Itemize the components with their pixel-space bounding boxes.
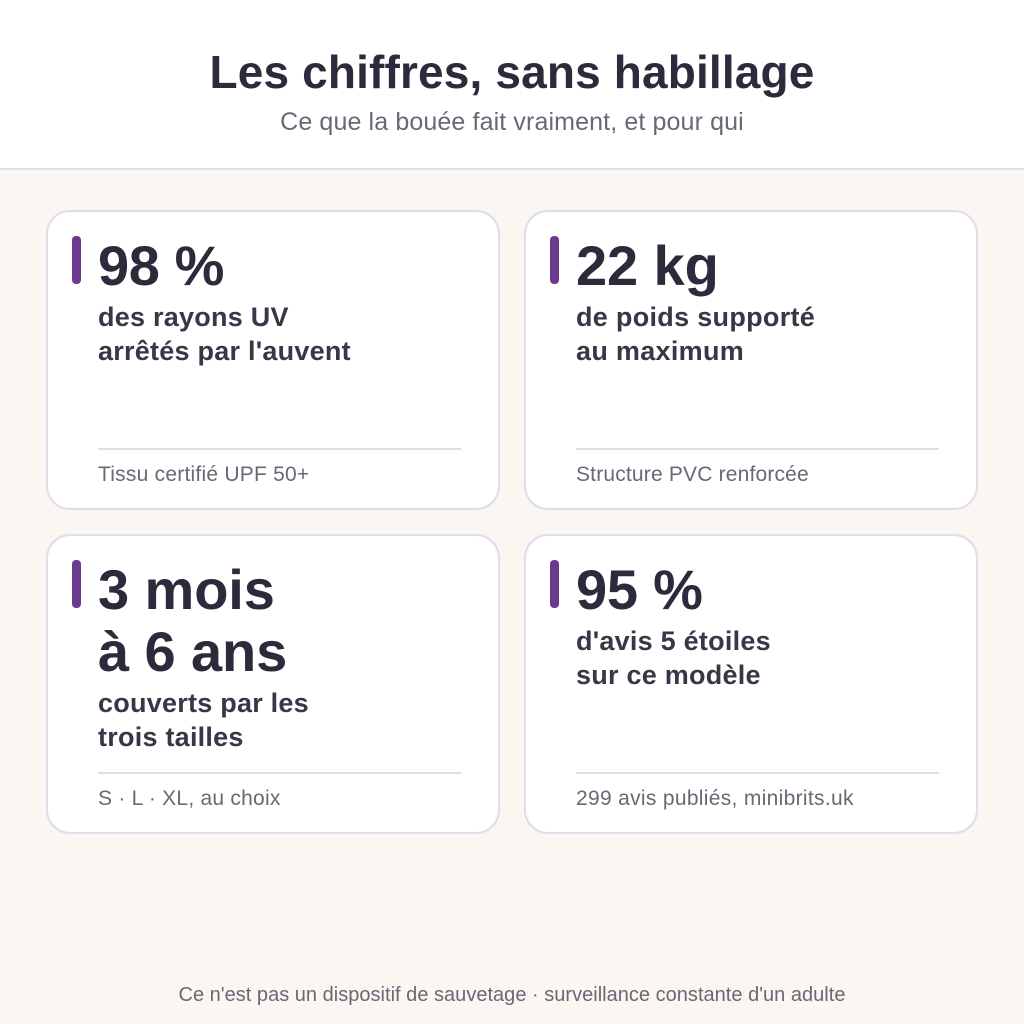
description: d'avis 5 étoiles — [576, 626, 771, 656]
divider — [98, 448, 461, 450]
header band — [0, 0, 1024, 170]
big number: 3 mois — [98, 558, 275, 621]
description: au maximum — [576, 336, 744, 366]
description: trois tailles — [98, 722, 244, 752]
divider — [576, 772, 939, 774]
big number — [98, 558, 287, 683]
description: sur ce modèle — [576, 660, 761, 690]
big number: 98 % — [98, 234, 224, 297]
footnote: Tissu certifié UPF 50+ — [98, 463, 309, 486]
footnote: 299 avis publiés, minibrits.uk — [576, 787, 854, 810]
description — [576, 302, 815, 366]
description: des rayons UV — [98, 302, 289, 332]
big number: 22 kg — [576, 234, 719, 297]
description: de poids supporté — [576, 302, 815, 332]
accent bar — [550, 560, 559, 608]
big number: 95 % — [576, 558, 703, 621]
description: arrêtés par l'auvent — [98, 336, 351, 366]
description — [576, 626, 771, 690]
accent bar — [550, 236, 559, 284]
panel: maximum weight — [524, 210, 978, 510]
description — [98, 302, 351, 366]
divider — [576, 448, 939, 450]
footnote: Structure PVC renforcée — [576, 463, 809, 486]
subtitle: Ce que la bouée fait vraiment, et pour qui — [280, 108, 744, 136]
divider — [98, 772, 461, 774]
footnote: S · L · XL, au choix — [98, 787, 281, 810]
description — [98, 688, 309, 752]
panel: reviews — [524, 534, 978, 834]
accent bar — [72, 236, 81, 284]
panel: age range — [46, 534, 500, 834]
panel: UV protection — [46, 210, 500, 510]
footer note: Ce n'est pas un dispositif de sauvetage · surveillance constante d'un adulte — [178, 984, 845, 1006]
accent bar — [72, 560, 81, 608]
description: couverts par les — [98, 688, 309, 718]
title: Les chiffres, sans habillage — [210, 46, 814, 98]
big number: à 6 ans — [98, 620, 287, 683]
